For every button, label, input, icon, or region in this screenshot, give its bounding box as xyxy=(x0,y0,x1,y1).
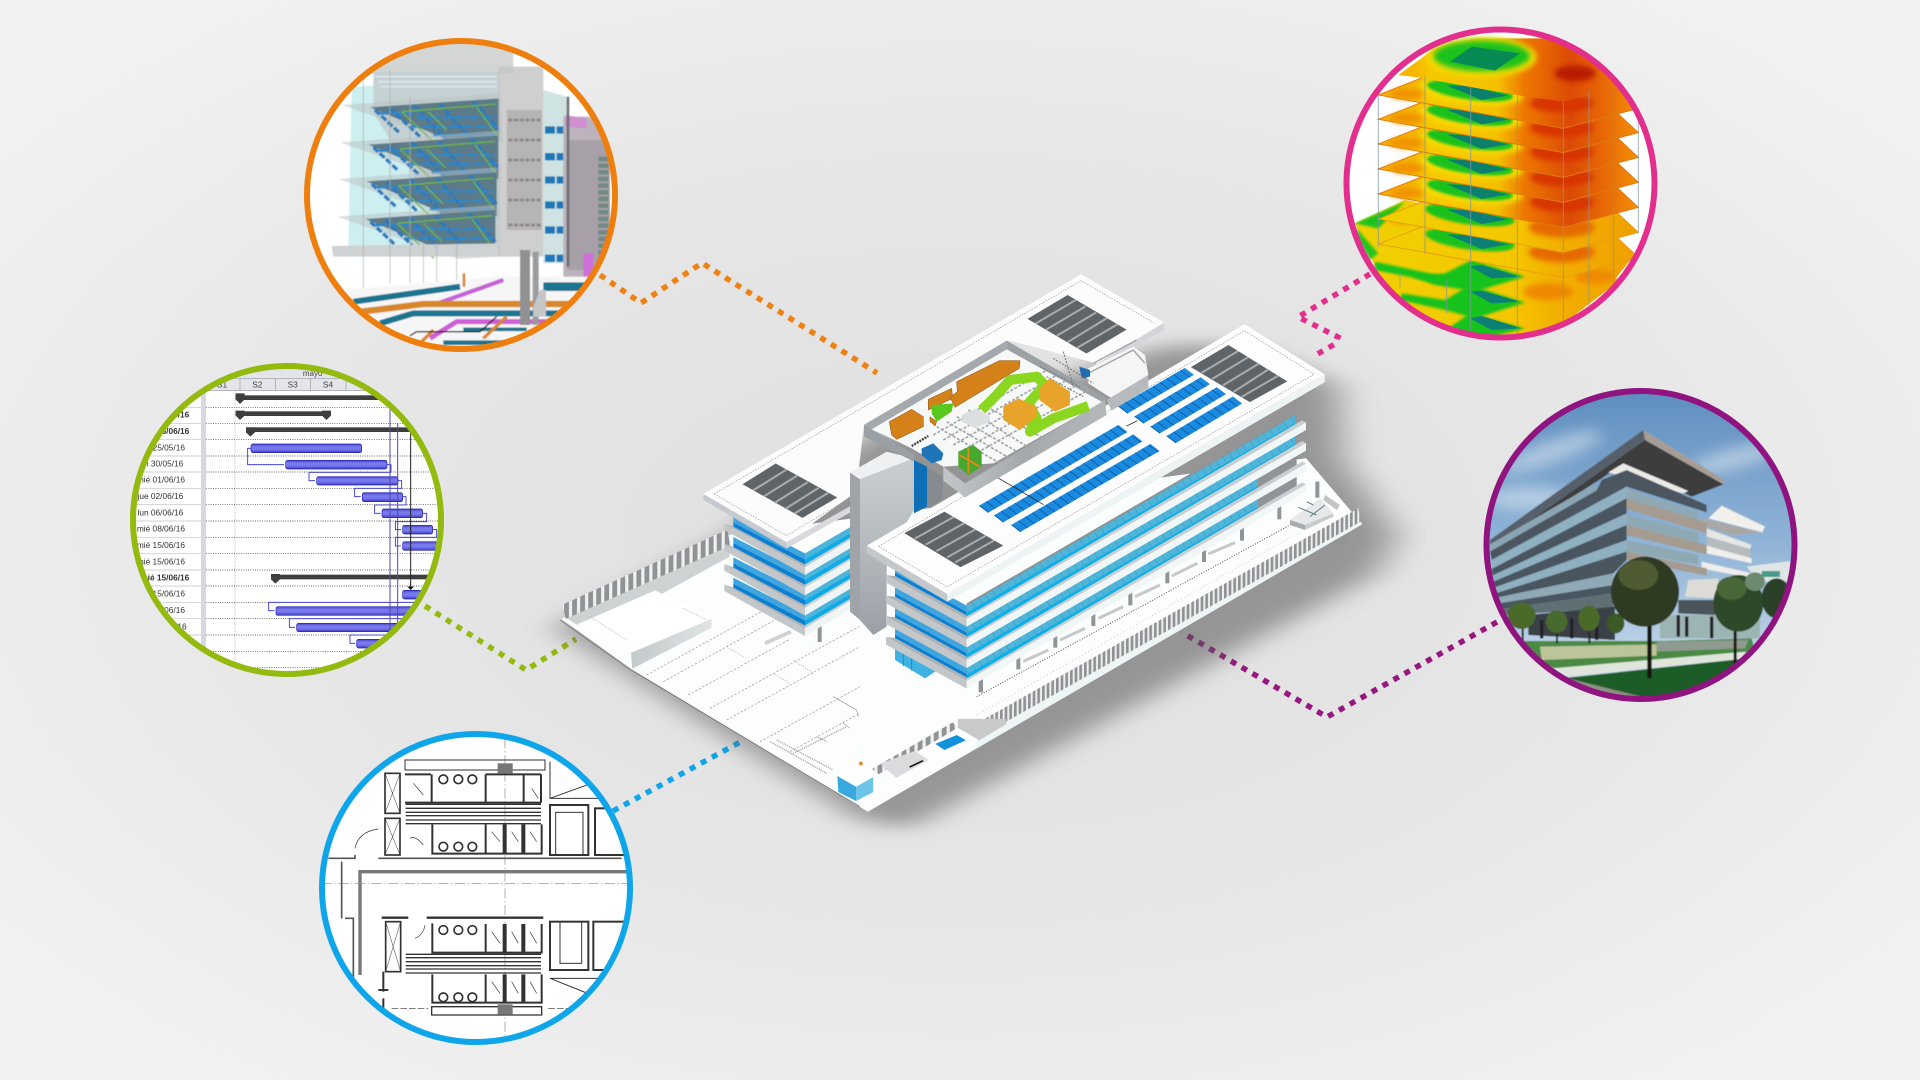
ring xyxy=(133,366,441,674)
ring xyxy=(1486,391,1794,699)
columns xyxy=(1016,482,1319,669)
gantt dates column: mié 18/05/16 xyxy=(140,409,190,419)
gantt header: S3 xyxy=(288,380,298,390)
connector: purple dotted line xyxy=(1183,622,1497,717)
gantt summary bars xyxy=(236,393,434,584)
raised plaza edge xyxy=(577,590,711,669)
gantt dates column: mié 01/06/16 xyxy=(137,475,185,485)
back wing roof xyxy=(703,274,1164,549)
isometric BIM building xyxy=(556,274,1397,828)
ground floor xyxy=(1528,607,1712,640)
core columns xyxy=(498,67,543,257)
upper restroom core xyxy=(355,760,545,855)
gantt connectors xyxy=(248,448,437,643)
mechanical room on roof xyxy=(864,340,1148,497)
rooftop louvers east xyxy=(1191,345,1287,402)
orange ducts xyxy=(889,361,1020,439)
orange equipment xyxy=(1003,378,1070,430)
floor mesh xyxy=(933,368,1088,463)
plant unit xyxy=(1290,498,1333,530)
upper grey volume xyxy=(372,44,514,74)
ring xyxy=(307,41,615,349)
circulation core xyxy=(850,452,943,635)
entrance details xyxy=(859,735,966,778)
white terraces xyxy=(1660,506,1765,638)
gantt header: S1 xyxy=(217,380,227,390)
services pipes xyxy=(344,276,588,346)
gantt grid xyxy=(206,407,460,668)
gantt dates column: mié 15/06/16 xyxy=(137,605,185,615)
facade floors xyxy=(1490,470,1707,615)
corridor walls xyxy=(360,872,632,975)
glass columns xyxy=(363,70,457,293)
site markings xyxy=(560,605,860,807)
gantt dates column: mié 15/06/16 xyxy=(140,426,190,436)
right-hand rooms xyxy=(549,762,624,993)
gantt dates column: lun 30/05/16 xyxy=(137,459,184,469)
circle: floor plan drawing (blue) xyxy=(315,725,645,1055)
connector: pink dotted line xyxy=(1298,274,1370,356)
ring xyxy=(322,734,630,1042)
main tower floors xyxy=(886,412,1306,692)
rooftop louvers north xyxy=(1027,295,1127,354)
gantt dates column: mié 15/06/16 xyxy=(137,540,185,550)
left tower floors xyxy=(724,517,858,642)
gantt header: S4 xyxy=(323,380,333,390)
gantt dates column: mié 15/06/16 xyxy=(137,556,185,566)
gantt dates column: mié 25/05/16 xyxy=(137,442,185,452)
gantt dates column: mié 08/06/16 xyxy=(137,524,185,534)
gantt dates column: jue 02/06/16 xyxy=(136,491,184,501)
gantt dates column: mié 15/06/16 xyxy=(140,573,190,583)
top floor xyxy=(1398,37,1622,102)
landscaping xyxy=(1522,638,1755,700)
circle: Gantt chart (green) xyxy=(130,363,444,677)
structural grid xyxy=(1378,77,1638,337)
gatehouse xyxy=(837,765,873,801)
right fence, columns and plant xyxy=(977,482,1362,748)
typical floors xyxy=(1378,74,1638,277)
connector: green dotted line xyxy=(425,606,576,670)
gantt header: S2 xyxy=(252,380,263,390)
connector: orange dotted line xyxy=(600,263,877,373)
clouds xyxy=(1485,423,1783,510)
circle: MEP model (orange) xyxy=(300,30,630,360)
gantt dates column: mié 15/06/16 xyxy=(139,621,187,631)
drop shadow xyxy=(556,346,1397,828)
green pipework xyxy=(982,377,1088,432)
entrance fence xyxy=(872,719,1006,774)
connector: blue dotted line xyxy=(613,740,744,811)
roof canopy xyxy=(1490,430,1724,549)
left fence xyxy=(562,530,730,625)
main tower roof xyxy=(867,324,1325,602)
gantt dates column: lun 06/06/16 xyxy=(137,507,184,517)
gantt task bars xyxy=(251,444,443,648)
gantt header xyxy=(208,369,366,391)
background building xyxy=(1747,561,1790,582)
circle: structural heat map (pink) xyxy=(1335,20,1665,350)
MEP floor plates xyxy=(337,93,503,259)
rooftop louvers west xyxy=(742,464,837,518)
solar panel array xyxy=(984,371,1237,529)
ground floor panels xyxy=(1023,543,1235,661)
rooftop louvers south xyxy=(904,512,1003,567)
trees xyxy=(1508,557,1792,678)
gantt dates column: mié 15/06/16 xyxy=(137,589,185,599)
lower restroom core xyxy=(378,918,568,1015)
gantt dates column xyxy=(136,392,206,648)
circle: rendered building photo (purple) xyxy=(1475,385,1805,715)
gantt header: mayo xyxy=(303,369,323,378)
ring xyxy=(1346,30,1654,338)
lower floors xyxy=(1354,200,1630,334)
raised equipment platform xyxy=(1079,340,1148,411)
site slab xyxy=(561,458,1362,812)
